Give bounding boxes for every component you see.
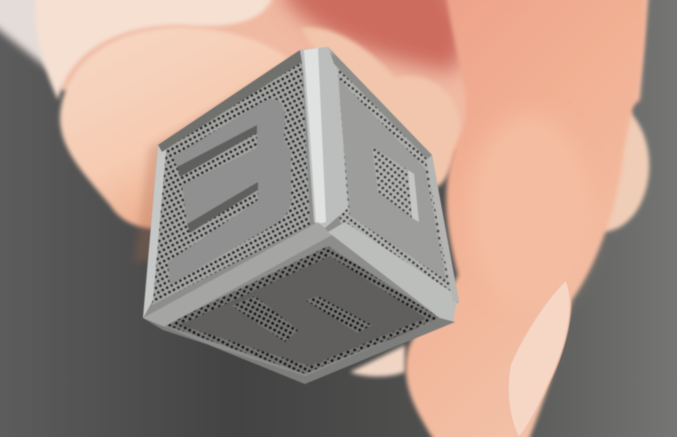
frame: right face outer edge	[426, 155, 459, 302]
frame: highlight on top edge	[304, 48, 326, 224]
cube: 3D printed metal lattice cube	[143, 34, 459, 392]
right face: embossed letter D: D	[332, 34, 446, 332]
frame: left face top edge	[158, 50, 302, 152]
fingernail: pale nail on thumb	[508, 280, 570, 437]
frame: bottom lower edges	[143, 318, 455, 384]
frame: right face top edge	[330, 52, 432, 162]
sleeve: pale cuff at top left	[0, 0, 60, 70]
finger: left fingertip behind cube	[60, 27, 300, 229]
bottom face: lattice slots in letter	[232, 296, 372, 342]
highlight: soft light on thumb	[470, 115, 590, 305]
highlight: pale palm at top left	[35, 0, 272, 100]
left face: embossed number 3	[168, 98, 292, 286]
finger: middle knuckle behind cube	[300, 27, 460, 187]
bottom face: lattice	[165, 246, 440, 374]
cube silhouette	[143, 47, 459, 384]
frame: left face left edge	[143, 145, 166, 318]
finger: ring finger edge at right	[600, 100, 649, 231]
frame: right-bottom edge	[328, 222, 458, 322]
left face: shaded slot walls	[177, 125, 258, 233]
thumb: large right finger in foreground	[406, 0, 644, 437]
shadow: cast shadow of cube on left finger	[134, 58, 294, 263]
shadow: red crease between fingers	[285, 0, 470, 72]
hand: palm and back of the hand	[35, 0, 650, 160]
right face: light wall beside window	[408, 170, 419, 222]
finger: small skin patch under cube	[350, 345, 405, 376]
frame: left-bottom edge	[143, 222, 332, 328]
bottom face: embossed letter S: S	[158, 243, 441, 392]
frame: vertical top edge	[300, 47, 348, 228]
right face: lattice	[332, 60, 455, 295]
right face: lattice window in letter	[372, 147, 412, 218]
right face: embossed letter D	[338, 80, 446, 278]
bottom face: embossed letter S	[180, 256, 426, 366]
left face: embossed number 3: 3	[161, 62, 304, 321]
left face: lattice	[152, 62, 310, 305]
